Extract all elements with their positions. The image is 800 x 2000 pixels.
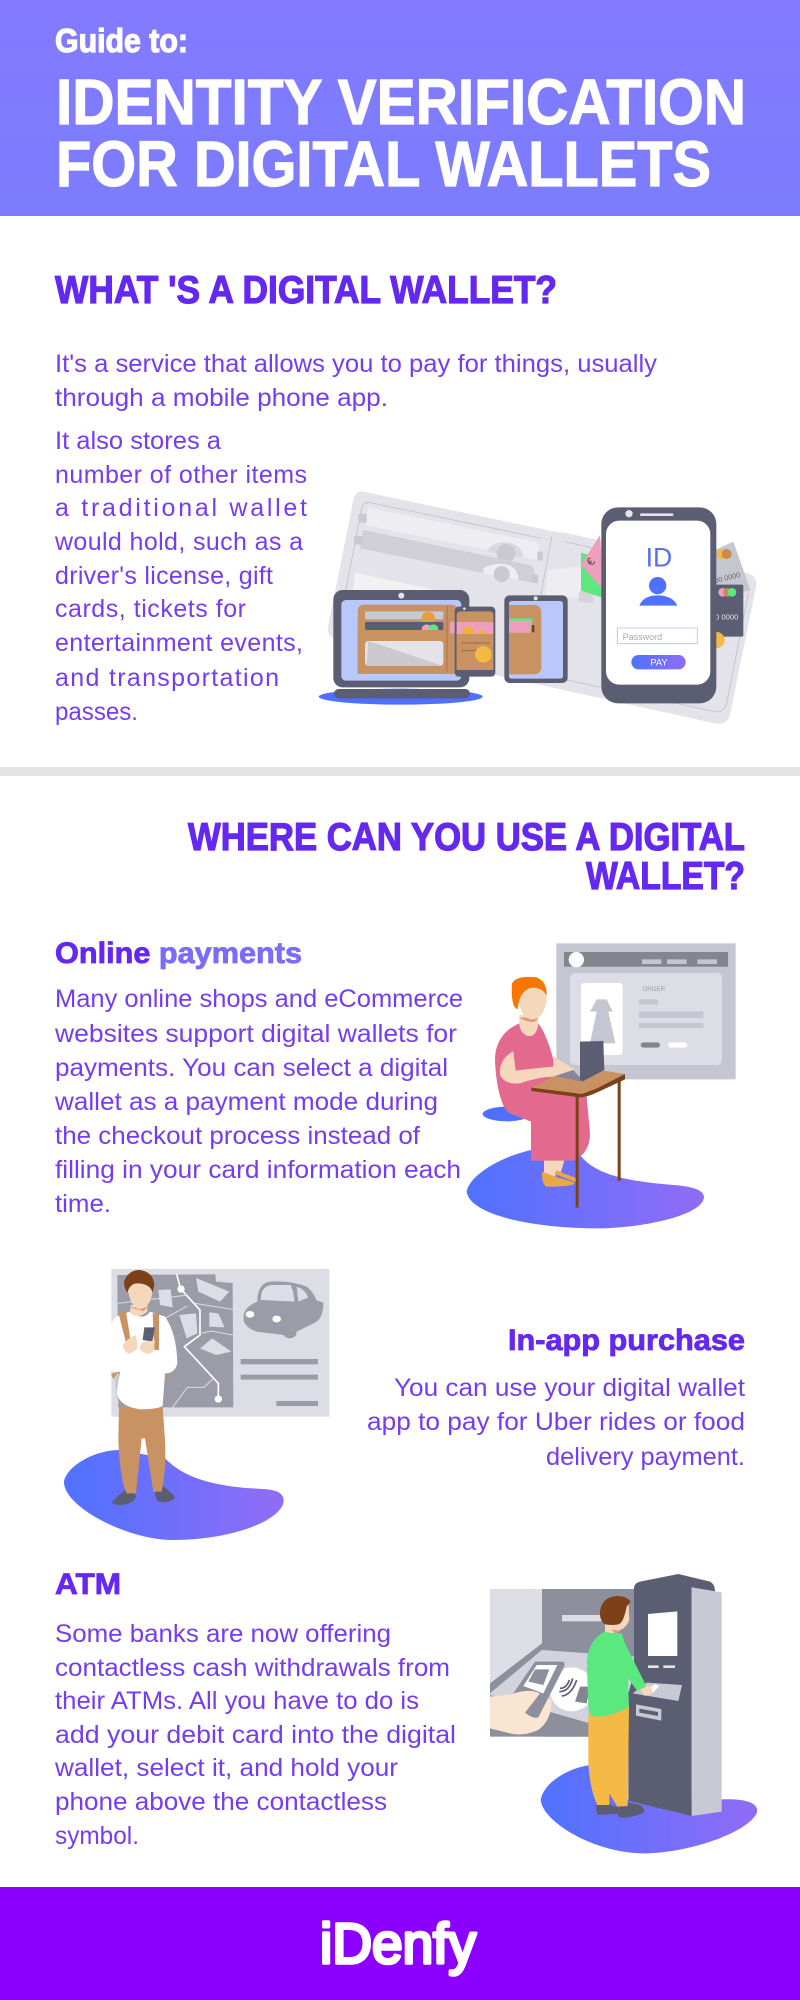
online payments text block: wallet as a payment mode during xyxy=(54,1088,438,1116)
online payments text block: Many online shops and eCommerce xyxy=(55,985,463,1013)
heading: what's a digital wallet: WHAT 'S A DIGITAL WALLET? xyxy=(55,269,557,312)
ATM text block xyxy=(54,1620,456,1850)
in-app purchase text block: delivery payment. xyxy=(546,1443,745,1471)
footer band xyxy=(0,1887,800,2000)
intro text block: through a mobile phone app. xyxy=(55,384,388,412)
illustration: man with phone and ride map xyxy=(64,1269,329,1540)
header banner xyxy=(0,0,800,216)
card and cash behind phone: 00 0000 xyxy=(713,570,741,585)
laptop on table xyxy=(531,1041,625,1208)
heading: where can you use a digital wallet: WHERE CAN YOU USE A DIGITAL xyxy=(188,816,745,859)
icon: car xyxy=(243,1281,323,1338)
wallet description text block: number of other items xyxy=(55,461,307,489)
tablet with wallet flap xyxy=(504,595,568,683)
wallet description text block: cards, tickets for xyxy=(55,595,246,623)
browser window xyxy=(556,943,736,1079)
person using ATM xyxy=(587,1596,653,1817)
heading: where can you use a digital wallet: WALLET? xyxy=(586,855,745,898)
online payments text block: websites support digital wallets for xyxy=(54,1020,457,1048)
subheading: online payments: Online payments xyxy=(55,937,302,970)
ATM text block: contactless cash withdrawals from xyxy=(55,1654,450,1682)
main title: IDENTITY VERIFICATION xyxy=(56,66,746,138)
seated woman xyxy=(495,977,590,1187)
intro text block xyxy=(55,350,658,412)
browser window: ORDER xyxy=(642,986,666,993)
phone with ID screen: PAY xyxy=(650,658,668,668)
wallet description text block: and transportation xyxy=(55,664,279,692)
blue floor shapes xyxy=(467,1107,704,1228)
section divider xyxy=(0,767,800,776)
online payments text block xyxy=(54,985,463,1218)
in-app purchase text block: You can use your digital wallet xyxy=(394,1374,745,1402)
ATM text block: symbol. xyxy=(55,1822,139,1850)
ATM text block: add your debit card into the digital xyxy=(55,1721,456,1749)
contactless payment scene xyxy=(490,1589,637,1737)
open wallet xyxy=(328,491,756,724)
ATM text block: Some banks are now offering xyxy=(55,1620,391,1648)
main title: FOR DIGITAL WALLETS xyxy=(56,128,711,200)
card and cash behind phone xyxy=(581,535,751,648)
ATM text block: wallet, select it, and hold your xyxy=(54,1754,398,1782)
phone with ID screen: ID xyxy=(646,543,672,573)
illustration: person at contactless ATM xyxy=(490,1574,757,1853)
blue floor shape xyxy=(64,1450,284,1540)
heading: where can you use a digital wallet xyxy=(188,816,745,898)
card and cash behind phone: € xyxy=(585,556,598,569)
wallet description text block xyxy=(54,427,307,726)
small phone with wallet xyxy=(455,607,495,677)
main title xyxy=(56,66,746,200)
subheading: in-app purchase: In-app purchase xyxy=(508,1324,745,1357)
online payments text block: the checkout process instead of xyxy=(55,1122,420,1150)
standing man xyxy=(106,1270,177,1505)
header kicker: Guide to: Guide to: xyxy=(55,22,188,59)
wallet description text block: entertainment events, xyxy=(55,629,303,657)
in-app purchase text block: app to pay for Uber rides or food xyxy=(367,1408,745,1436)
wallet description text block: driver's license, gift xyxy=(55,562,273,590)
ATM machine xyxy=(628,1574,722,1816)
wallet description text block: would hold, such as a xyxy=(54,528,303,556)
blue floor shape xyxy=(541,1765,757,1853)
ATM text block: phone above the contactless xyxy=(55,1788,387,1816)
card and cash behind phone: 0 0000 xyxy=(715,612,738,621)
wallet description text block: It also stores a xyxy=(55,427,221,455)
phone with ID screen xyxy=(601,507,716,703)
logo: iDenfy: iDenfy xyxy=(320,1912,476,1976)
intro text block: It's a service that allows you to pay for things, usually xyxy=(55,350,658,378)
wallet description text block: passes. xyxy=(55,698,138,726)
icon: person xyxy=(639,577,677,606)
tablet device with wallet xyxy=(319,590,483,705)
illustration: wallet with devices xyxy=(319,491,756,724)
online payments text block: time. xyxy=(55,1190,111,1218)
online payments text block: payments. You can select a digital xyxy=(55,1054,448,1082)
wallet description text block: a traditional wallet xyxy=(55,494,307,522)
illustration: woman shopping online xyxy=(467,943,736,1228)
subheading: ATM: ATM xyxy=(55,1568,121,1601)
phone with ID screen: Password xyxy=(623,632,662,642)
ride app screen xyxy=(111,1269,329,1417)
in-app purchase text block xyxy=(367,1374,745,1471)
online payments text block: filling in your card information each xyxy=(55,1156,461,1184)
ATM text block: their ATMs. All you have to do is xyxy=(55,1687,419,1715)
